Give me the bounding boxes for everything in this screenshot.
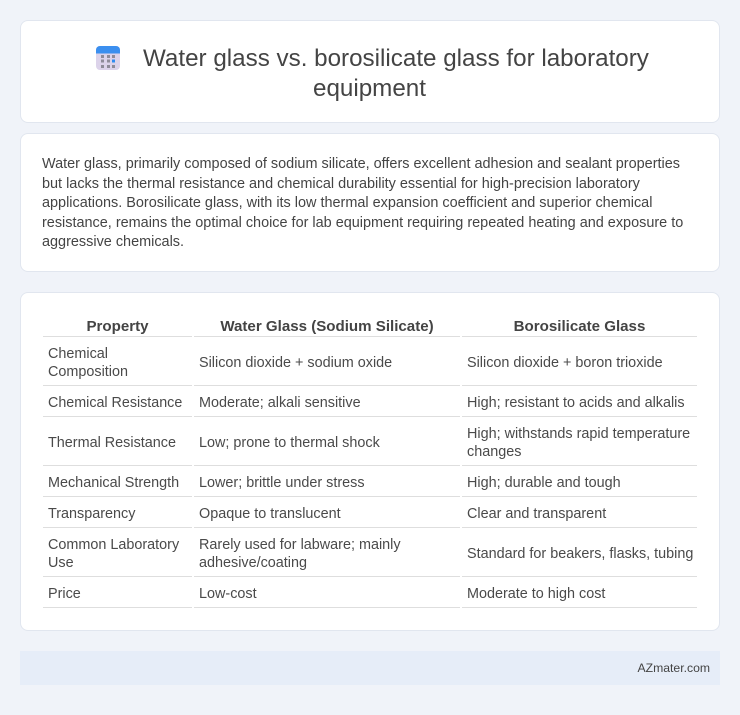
row: common laboratory use: Use: [48, 555, 74, 571]
text block: summary paragraph: resistance, remains the optimal choice for lab equipment requiring repeated heating and exposure to: [42, 214, 683, 230]
panel: title card: [20, 20, 720, 123]
text block: summary paragraph: aggressive chemicals.: [42, 234, 184, 250]
row: mechanical strength: Mechanical Strength: [48, 475, 179, 491]
row: chemical composition: Silicon dioxide + boron trioxide: [467, 355, 663, 371]
table header: Property: [86, 318, 149, 335]
row: chemical composition: Chemical: [48, 346, 108, 362]
text block: summary paragraph: [42, 156, 683, 250]
row: chemical composition: Silicon dioxide + sodium oxide: [199, 355, 392, 371]
table header: Water Glass (Sodium Silicate): [220, 318, 434, 335]
row: chemical resistance: High; resistant to acids and alkalis: [467, 395, 685, 411]
row: chemical composition: Composition: [48, 364, 128, 380]
text block: summary paragraph: Water glass, primarily composed of sodium silicate, offers excellent adhesion and sealant properties: [42, 156, 680, 172]
row: price: Low-cost: [199, 586, 257, 602]
row: mechanical strength: High; durable and tough: [467, 475, 621, 491]
row: price: Price: [48, 586, 81, 602]
row: thermal resistance: changes: [467, 444, 521, 460]
row: price: Moderate to high cost: [467, 586, 605, 602]
title: equipment: [313, 74, 426, 102]
icon: calendar grid: [96, 46, 120, 70]
row: thermal resistance: Thermal Resistance: [48, 435, 176, 451]
table header: [86, 318, 645, 335]
row: common laboratory use: adhesive/coating: [199, 555, 307, 571]
footer credit: AZmater.com: [638, 661, 710, 675]
text block: summary paragraph: but lacks the thermal resistance and chemical durability essential for high-precision laboratory: [42, 176, 640, 192]
row: mechanical strength: Lower; brittle under stress: [199, 475, 365, 491]
row: price: [48, 586, 606, 602]
row: thermal resistance: Low; prone to thermal shock: [199, 435, 380, 451]
panel: comparison table: [20, 292, 720, 631]
title: Water glass vs. borosilicate glass for laboratory: [143, 45, 649, 72]
row: common laboratory use: Common Laboratory: [48, 537, 179, 553]
row: transparency: Transparency: [48, 506, 135, 522]
title: [143, 45, 649, 102]
footer bar: [20, 651, 720, 685]
text block: summary paragraph: applications. Borosilicate glass, with its low thermal expansion coefficient and superior chemical: [42, 195, 652, 211]
row: chemical composition: [48, 346, 663, 380]
row: transparency: Opaque to translucent: [199, 506, 341, 522]
row: transparency: Clear and transparent: [467, 506, 606, 522]
table header: Borosilicate Glass: [514, 318, 645, 335]
row: thermal resistance: High; withstands rapid temperature: [467, 426, 690, 442]
row: common laboratory use: Rarely used for labware; mainly: [199, 537, 401, 553]
row: thermal resistance: [48, 426, 690, 460]
row: chemical resistance: Chemical Resistance: [48, 395, 182, 411]
row: chemical resistance: [48, 395, 685, 411]
row: transparency: [48, 506, 606, 522]
panel: summary: [20, 133, 720, 272]
row: mechanical strength: [48, 475, 621, 491]
row: chemical resistance: Moderate; alkali sensitive: [199, 395, 361, 411]
row: common laboratory use: Standard for beakers, flasks, tubing: [467, 546, 693, 562]
row: common laboratory use: [48, 537, 693, 571]
